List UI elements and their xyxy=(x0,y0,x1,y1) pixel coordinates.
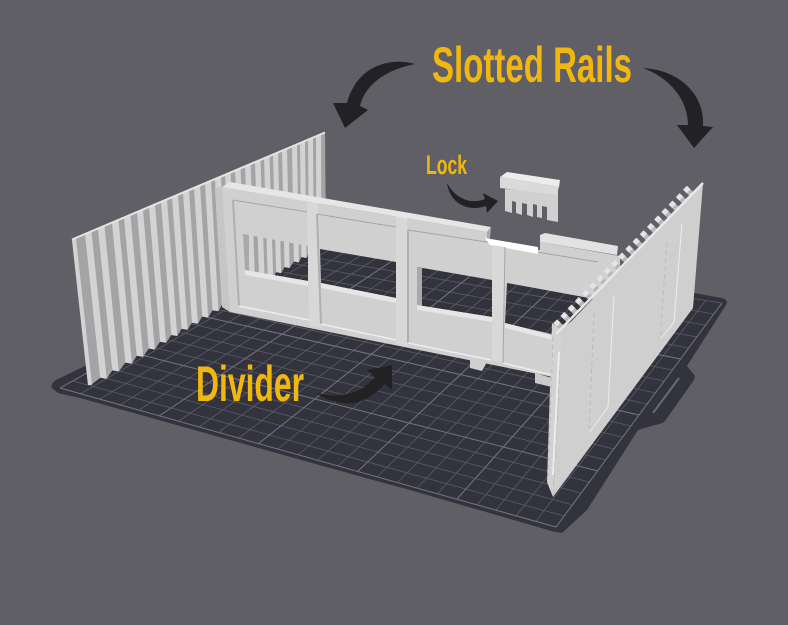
right slotted rail xyxy=(547,183,703,497)
label: lock: Lock xyxy=(426,150,468,180)
right block xyxy=(540,233,618,255)
lock piece xyxy=(500,172,560,222)
divider left edge shading xyxy=(215,187,230,311)
label: divider: Divider xyxy=(196,356,304,412)
divider top face xyxy=(222,182,491,232)
divider end face xyxy=(487,227,491,241)
divider panel xyxy=(215,182,620,387)
label: slotted rails: Slotted Rails xyxy=(432,37,632,93)
arrow: right rail xyxy=(643,68,713,148)
posts xyxy=(307,200,408,347)
panel inset lines xyxy=(233,200,598,262)
divider feet xyxy=(470,357,552,387)
arrow: divider xyxy=(315,365,392,403)
vertical posts xyxy=(492,245,505,363)
rail teeth xyxy=(555,184,694,327)
arrow: left rail xyxy=(333,62,415,128)
panel outlines on rail xyxy=(553,223,682,475)
left slotted rail xyxy=(72,132,326,385)
arrow: lock xyxy=(447,183,498,213)
lock slot xyxy=(485,238,538,254)
print bed xyxy=(52,235,727,533)
window reveals and sills xyxy=(243,234,553,340)
